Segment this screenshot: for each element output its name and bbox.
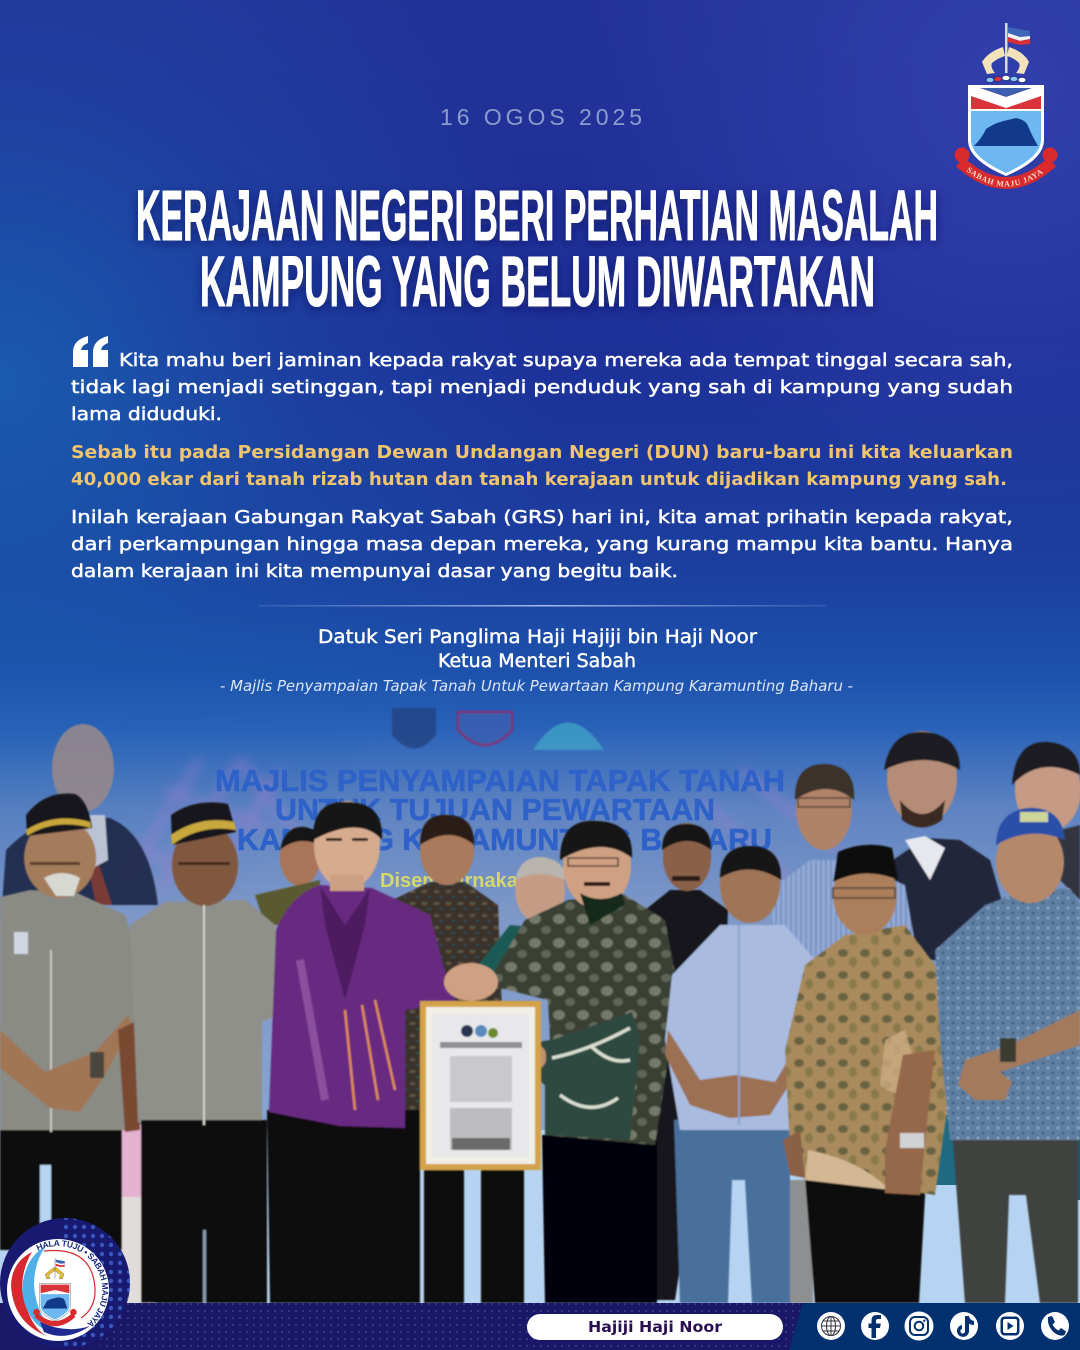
badge small crest bbox=[33, 1258, 77, 1324]
quote paragraph 1: Kita mahu beri jaminan kepada rakyat supaya mereka ada tempat tinggal secara sah, bbox=[119, 350, 1013, 371]
person behind: pink and white clothing bbox=[110, 1125, 155, 1305]
icon: youtube bbox=[996, 1312, 1024, 1340]
icon: facebook bbox=[861, 1312, 889, 1340]
date: 16 OGOS 2025 bbox=[440, 104, 642, 130]
crest beads bbox=[986, 75, 1026, 83]
icon: phone bbox=[1041, 1312, 1069, 1340]
footer band bbox=[0, 1303, 1080, 1350]
icon: instagram bbox=[904, 1312, 934, 1340]
title bbox=[136, 177, 938, 322]
quote paragraph 1 bbox=[71, 350, 1013, 425]
quote paragraph 3: Inilah kerajaan Gabungan Rakyat Sabah (GRS) hari ini, kita amat prihatin kepada rakyat, bbox=[71, 507, 1013, 528]
emblem: Sabah state crest bbox=[954, 23, 1058, 189]
person: man with blue cap in patterned shirt bbox=[935, 808, 1080, 1303]
badge swooshes bbox=[11, 1246, 90, 1338]
person: legs under certificate bbox=[424, 1160, 524, 1303]
quote paragraph 2 highlighted: 40,000 ekar dari tanah rizab hutan dan tanah kerajaan untuk dijadikan kampung yang sah. bbox=[71, 469, 1007, 490]
framed certificate bbox=[423, 1004, 538, 1167]
photo: group of people bbox=[0, 764, 1080, 1305]
attribution: - Majlis Penyampaian Tapak Tanah Untuk Pewartaan Kampung Karamunting Baharu - bbox=[220, 677, 853, 695]
poster heading: Disempurnakan bbox=[380, 870, 530, 892]
person: man in light blue shirt bbox=[665, 846, 815, 1303]
person: grey leg behind bbox=[787, 1180, 813, 1303]
quote paragraph 2 highlighted bbox=[71, 442, 1013, 490]
person: left man with songkok, grey shirt bbox=[0, 793, 155, 1250]
person: second man with songkok, grey shirt bbox=[118, 802, 288, 1303]
attribution: Datuk Seri Panglima Haji Hajiji bin Haji Noor bbox=[318, 627, 757, 648]
backdrop lattice bbox=[125, 760, 840, 900]
poster logos bbox=[392, 708, 604, 750]
footer social panel bbox=[789, 1303, 1080, 1350]
badge ring text: HALA TUJU • SABAH MAJU JAYA bbox=[36, 1240, 108, 1326]
person: tall man with glasses, striped shirt bbox=[770, 764, 925, 1000]
person: older man behind handshake bbox=[478, 857, 565, 1000]
handshake bbox=[444, 963, 546, 1069]
icon: tiktok bbox=[950, 1312, 978, 1340]
poster portrait left bbox=[2, 724, 158, 905]
crest ribbon bbox=[954, 148, 1058, 189]
badge: Hala Tuju Sabah Maju Jaya logo bbox=[0, 1218, 130, 1346]
person: man in green batik holding frame bbox=[495, 821, 680, 1303]
person: man with dark shirt and moustache bbox=[645, 823, 728, 1300]
attribution bbox=[220, 627, 853, 695]
poster heading: KAMPUNG KARAMUNTING BAHARU bbox=[237, 822, 772, 857]
quote paragraph 1: lama diduduki. bbox=[71, 404, 222, 425]
crest ribbon: SABAH MAJU JAYA bbox=[966, 168, 1044, 186]
attribution: Ketua Menteri Sabah bbox=[438, 651, 636, 672]
person: man in yellow batik with black songkok bbox=[783, 845, 957, 1303]
quote paragraph 3: dalam kerajaan ini kita mempunyai dasar yang begitu baik. bbox=[71, 561, 678, 582]
quote paragraph 3: dari perkampungan hingga masa depan mereka, yang kurang mampu kita bantu. Hanya bbox=[71, 534, 1013, 555]
quote paragraph 3 bbox=[71, 507, 1013, 582]
name pill: Hajiji Haji Noor bbox=[588, 1318, 723, 1336]
poster heading: UNTUK TUJUAN PEWARTAAN bbox=[275, 792, 715, 827]
person: back man behind purple shirt bbox=[255, 827, 320, 925]
poster heading bbox=[215, 763, 785, 892]
crest shield bbox=[968, 85, 1044, 176]
name pill bbox=[527, 1314, 783, 1340]
poster portraits right bbox=[884, 731, 1080, 960]
icon: quotation mark bbox=[73, 336, 108, 367]
crest flag bbox=[1005, 23, 1030, 73]
floor bbox=[0, 1130, 1080, 1305]
person: man in dark batik bbox=[376, 815, 505, 1303]
poster heading: MAJLIS PENYAMPAIAN TAPAK TANAH bbox=[215, 763, 785, 798]
quote paragraph 2 highlighted: Sebab itu pada Persidangan Dewan Undangan Negeri (DUN) baru-baru ini kita keluarkan bbox=[71, 442, 1013, 463]
person: man in purple shirt bbox=[267, 801, 455, 1303]
man 1 arms and hands bbox=[0, 1015, 132, 1112]
quote paragraph 1: tidak lagi menjadi setinggan, tapi menjadi penduduk yang sah di kampung yang sudah bbox=[71, 377, 1013, 398]
crest arms bbox=[982, 47, 1029, 74]
icon: website globe bbox=[817, 1312, 845, 1340]
photo: stage backdrop with poster portraits bbox=[0, 708, 1080, 1305]
